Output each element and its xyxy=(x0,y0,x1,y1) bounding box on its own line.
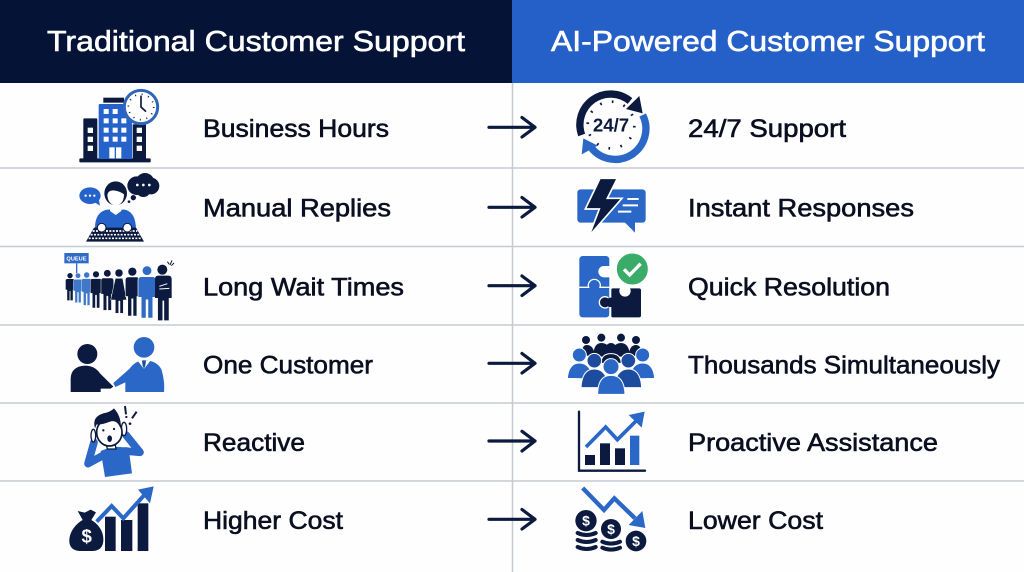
icon: stressed person xyxy=(88,406,140,477)
label: reactive: Reactive xyxy=(203,429,305,457)
icon: falling cost with coins: $ xyxy=(582,513,590,529)
label: higher cost: Higher Cost xyxy=(203,507,343,535)
icon: lightning chat bubble xyxy=(577,178,646,236)
arrow xyxy=(489,276,535,296)
label: instant responses: Instant Responses xyxy=(688,194,914,222)
icon: 24/7 clock: 24/7 xyxy=(593,114,629,135)
icon: puzzle with check mark xyxy=(579,253,648,317)
icon: agent typing at keyboard xyxy=(79,173,159,242)
icon: waiting queue xyxy=(64,253,174,320)
arrow xyxy=(489,510,535,529)
label: proactive assistance: Proactive Assistance xyxy=(688,429,938,457)
icon: falling cost with coins: $ xyxy=(632,533,640,549)
icon: falling cost with coins xyxy=(575,488,646,551)
icon: crowd of customers xyxy=(567,334,655,394)
label: business hours: Business Hours xyxy=(203,115,389,143)
arrow xyxy=(489,198,535,217)
arrow xyxy=(489,118,535,137)
header: AI-powered customer support xyxy=(512,0,1024,83)
header: traditional customer support: Traditional Customer Support xyxy=(47,26,465,58)
icon: falling cost with coins: $ xyxy=(607,521,615,537)
header: AI-powered customer support: AI-Powered Customer Support xyxy=(551,26,985,58)
label: 24/7 support: 24/7 Support xyxy=(688,115,846,143)
label: thousands simultaneously: Thousands Simultaneously xyxy=(688,352,1001,380)
label: long wait times: Long Wait Times xyxy=(203,274,404,302)
label: manual replies: Manual Replies xyxy=(203,194,391,222)
label: one customer: One Customer xyxy=(203,352,373,380)
icon: one-to-one handshake xyxy=(71,337,164,392)
arrow xyxy=(489,354,535,373)
label: quick resolution: Quick Resolution xyxy=(688,274,890,302)
arrow xyxy=(489,431,535,451)
icon: waiting queue: QUEUE xyxy=(66,256,87,262)
label: lower cost: Lower Cost xyxy=(688,507,823,535)
icon: money bag with rising bars xyxy=(69,486,154,551)
header: traditional customer support xyxy=(0,0,512,83)
icon: money bag with rising bars: $ xyxy=(81,526,92,547)
icon: growth chart xyxy=(579,412,645,471)
icon: 24/7 clock xyxy=(580,94,646,159)
icon: office building with clock xyxy=(79,90,158,162)
